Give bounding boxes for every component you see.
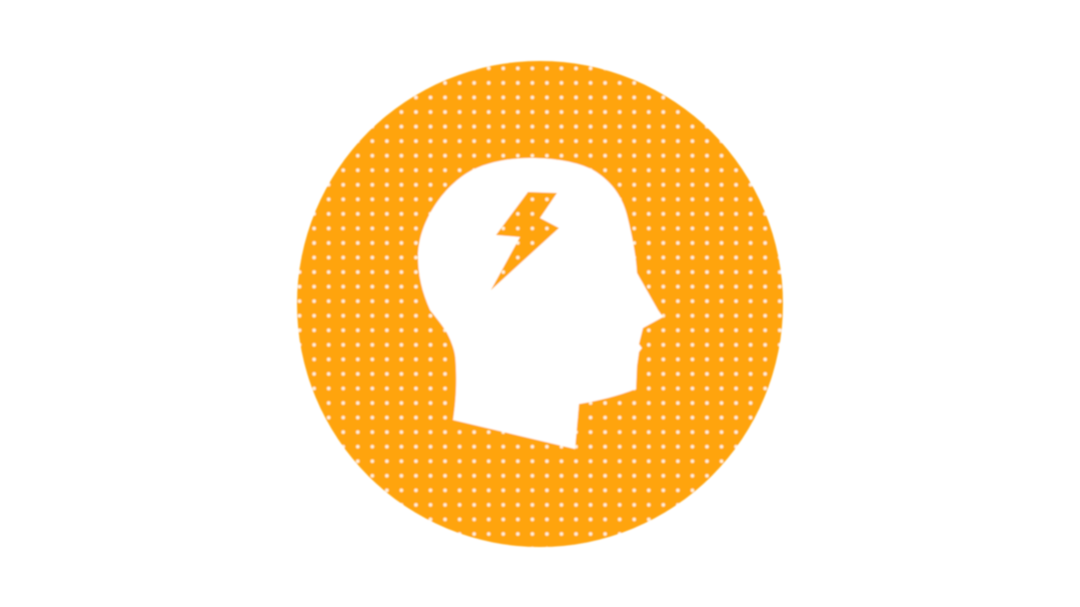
head silhouette <box>418 158 663 449</box>
lightning bolt <box>491 192 559 290</box>
orange dotted circle <box>297 61 783 547</box>
